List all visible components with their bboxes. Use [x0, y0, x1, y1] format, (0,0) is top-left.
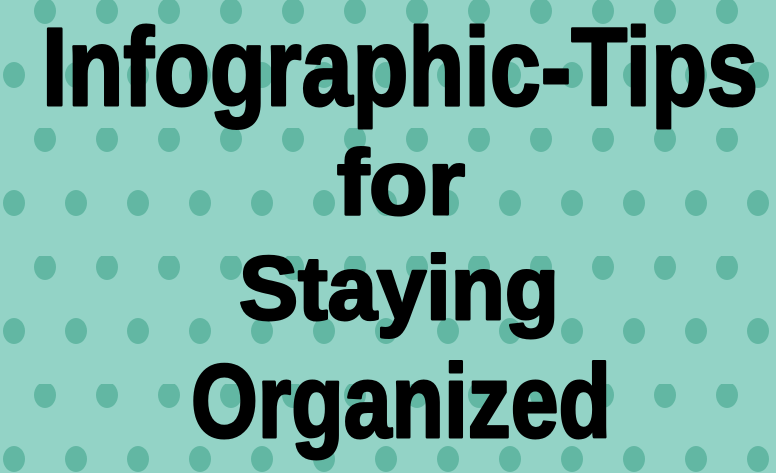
title line 3: Staying [239, 239, 559, 339]
title line 4: Organized [191, 344, 611, 460]
title line 2: for [337, 132, 465, 234]
